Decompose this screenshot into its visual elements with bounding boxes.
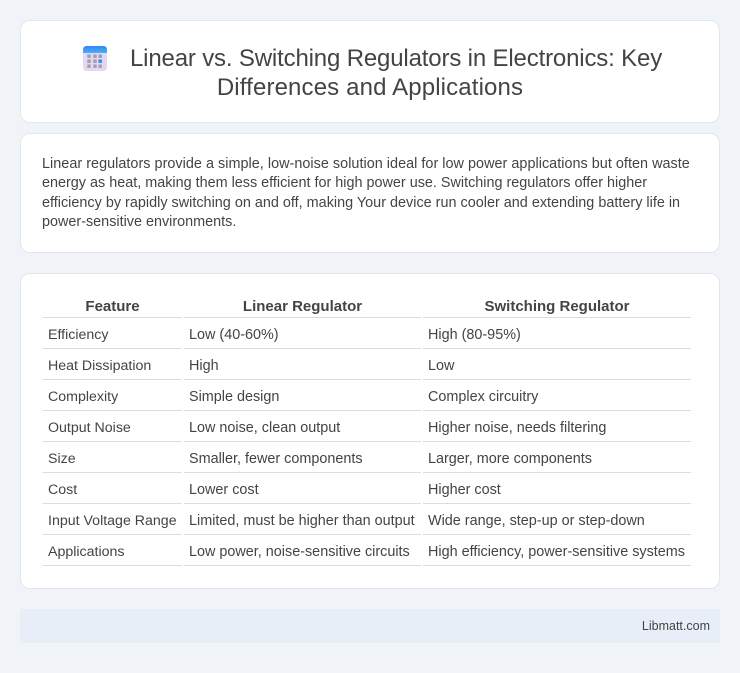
comparison table: Low [428,358,454,374]
comparison table: Simple design [189,389,279,405]
comparison table: Low noise, clean output [189,420,340,436]
comparison table: Cost [48,482,77,498]
comparison table: Efficiency [48,327,108,343]
title [130,45,662,101]
comparison table [43,298,691,566]
comparison table: Applications [48,544,125,560]
footer text: Libmatt.com: Libmatt.com [642,619,710,633]
comparison table: High [189,358,219,374]
title: Differences and Applications [217,74,523,101]
text block: introduction [42,156,690,230]
comparison table: Wide range, step-up or step-down [428,513,645,529]
text block: introduction: efficiency by rapidly switching on and off, making Your device run cooler and extending battery life in [42,195,680,211]
comparison table: Low power, noise-sensitive circuits [189,544,410,560]
panel: intro card [20,133,720,253]
text block: introduction: power-sensitive environments. [42,214,236,230]
comparison table: Complex circuitry [428,389,538,405]
comparison table: Input Voltage Range [48,513,177,529]
comparison table: Output Noise [48,420,131,436]
panel: title card [20,20,720,123]
comparison table: High (80-95%) [428,327,521,343]
comparison table: Heat Dissipation [48,358,151,374]
comparison table: Limited, must be higher than output [189,513,415,529]
panel: comparison table card [20,273,720,589]
title: Linear vs. Switching Regulators in Electronics: Key [130,45,662,72]
comparison table: Smaller, fewer components [189,451,363,467]
column header: Switching Regulator: Switching Regulator [484,298,630,315]
column header: Feature: Feature [85,298,140,315]
column header: Linear Regulator: Linear Regulator [243,298,362,315]
text block: introduction: Linear regulators provide a simple, low-noise solution ideal for low power applications but often waste [42,156,690,172]
text block: introduction: energy as heat, making them less efficient for high power use. Switching regulators offer higher [42,175,647,191]
comparison table: Size [48,451,76,467]
comparison table: Complexity [48,389,118,405]
comparison table: High efficiency, power-sensitive systems [428,544,685,560]
icon: calendar grid [83,46,107,71]
comparison table: Higher noise, needs filtering [428,420,606,436]
footer bar [20,609,720,643]
comparison table: Lower cost [189,482,259,498]
comparison table: Low (40-60%) [189,327,279,343]
comparison table: Higher cost [428,482,501,498]
comparison table: Larger, more components [428,451,592,467]
